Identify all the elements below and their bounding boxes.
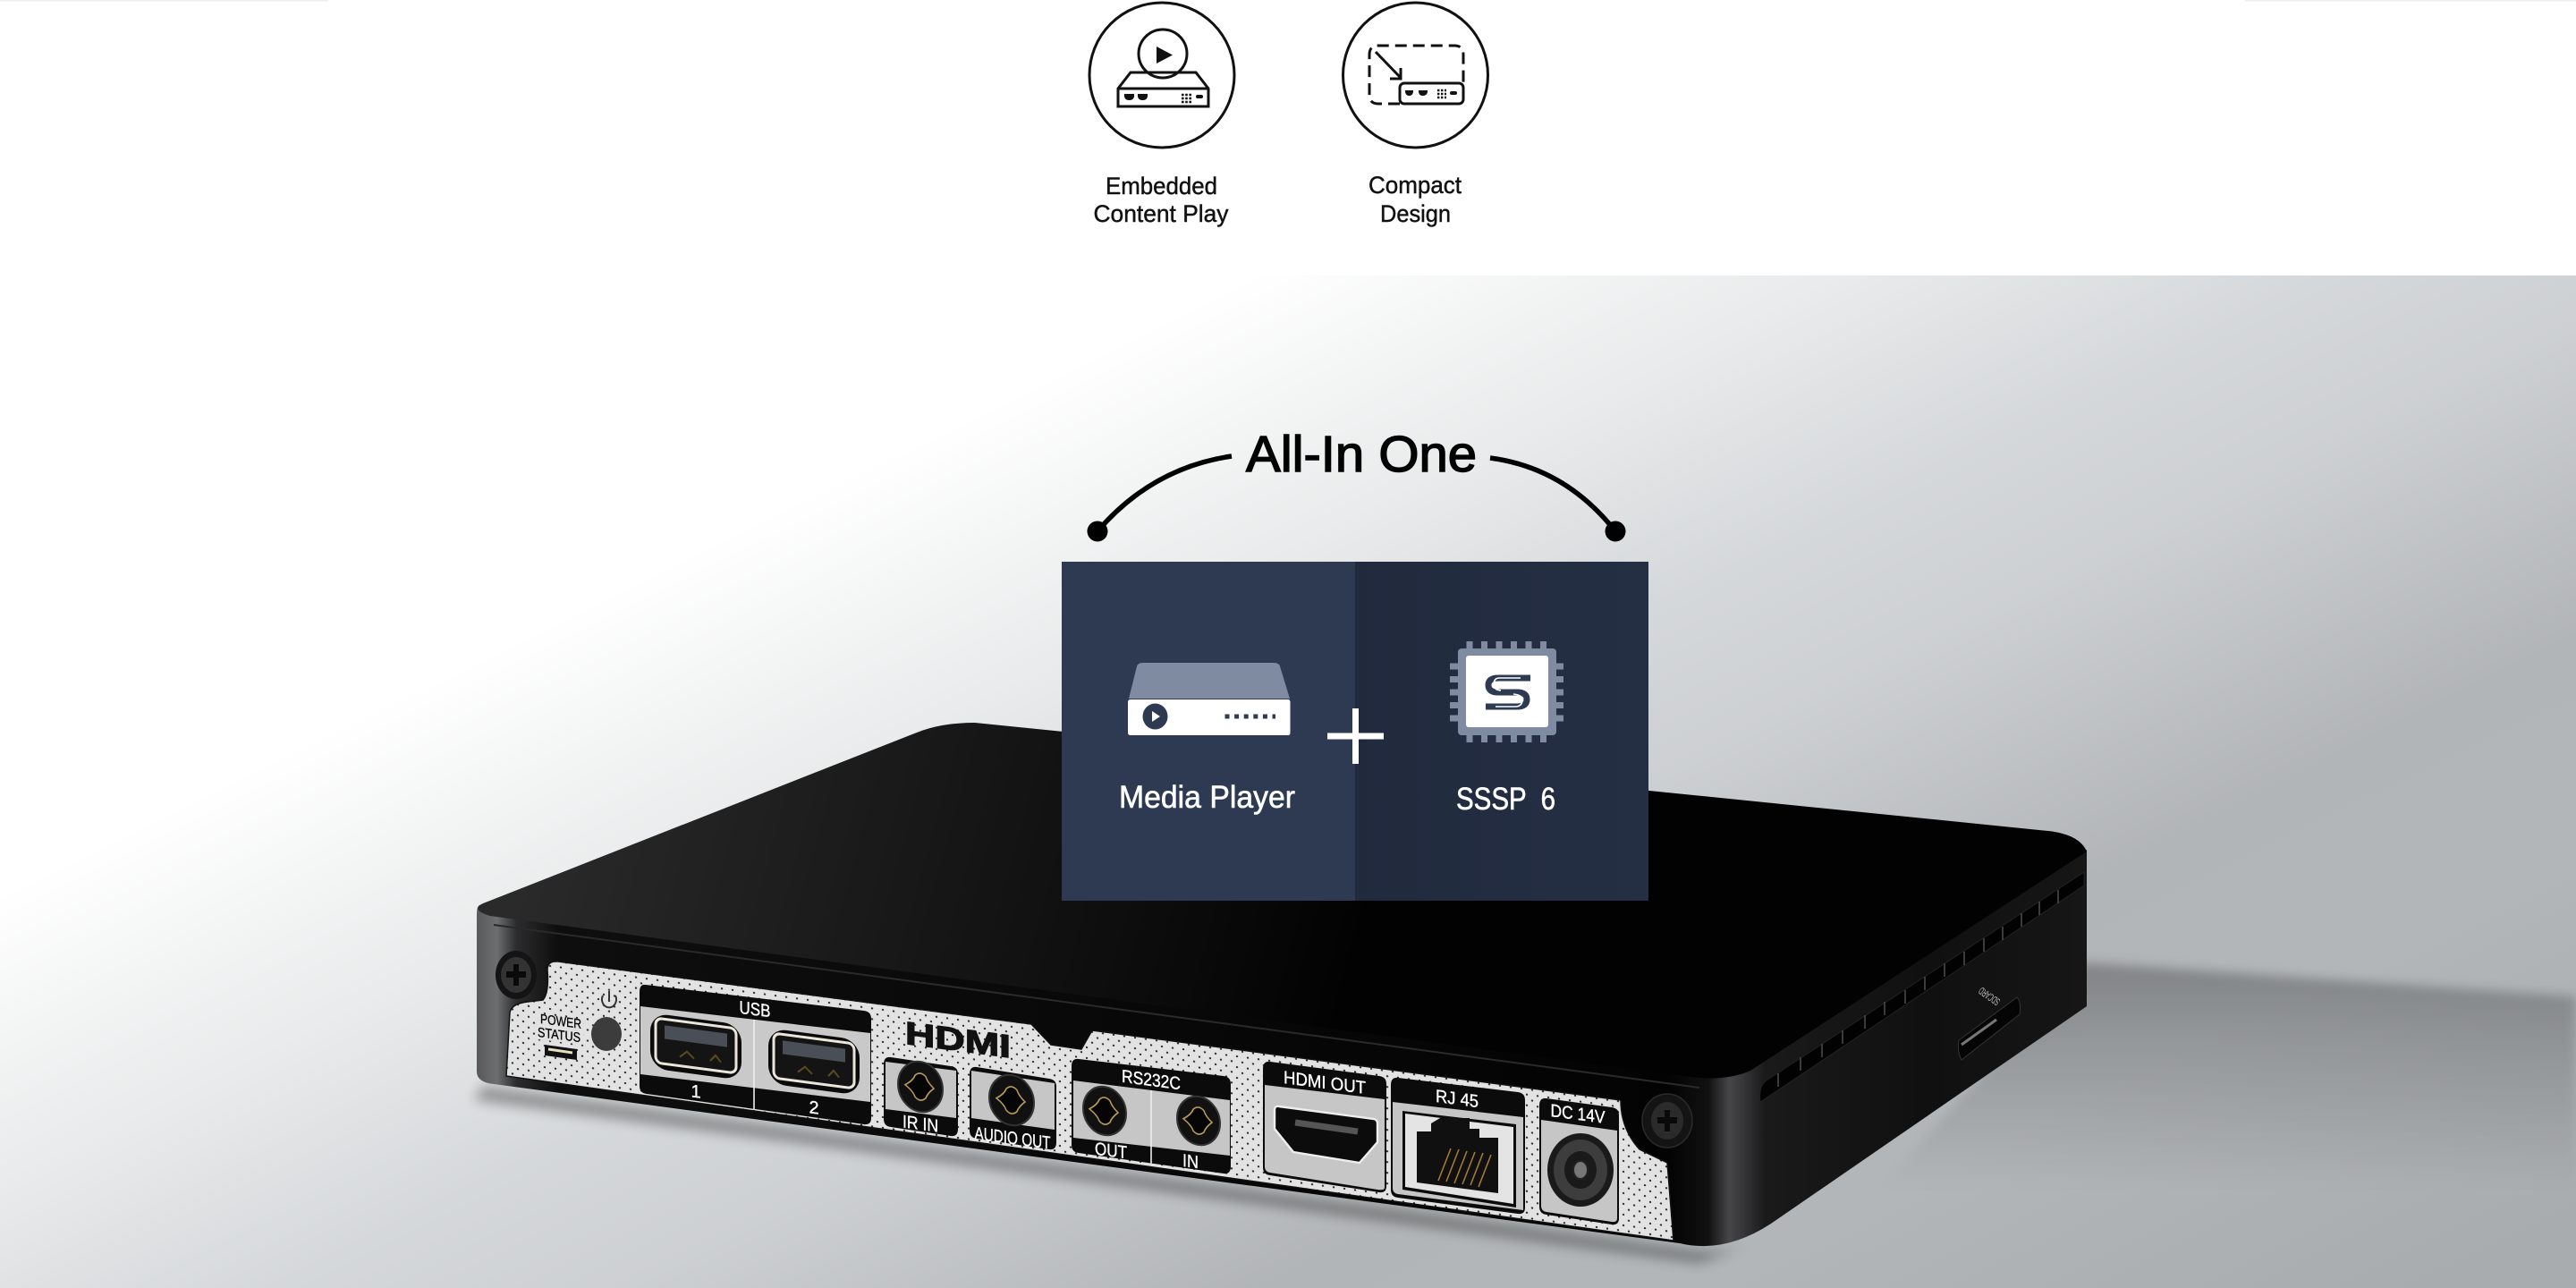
USB block xyxy=(640,985,871,1124)
device top surface xyxy=(478,723,2087,1078)
heading: All-In One: All-In One xyxy=(1246,426,1477,483)
AUDIO OUT port: AUDIO OUT xyxy=(975,1123,1050,1154)
RJ 45 port: RJ 45 xyxy=(1436,1087,1479,1112)
device: media player box xyxy=(474,723,2087,1263)
DC 14V port xyxy=(1539,1098,1619,1224)
microSD slot: SDCARD xyxy=(1976,985,2003,1008)
AUDIO OUT port xyxy=(970,1067,1056,1154)
power status label and controls: STATUS xyxy=(538,1025,580,1046)
background: grey gradient stage xyxy=(0,275,2576,1288)
icon: media player xyxy=(1128,663,1290,735)
icon: compact design xyxy=(1343,3,1488,148)
RS232C block xyxy=(1072,1059,1231,1174)
device ground shadow xyxy=(474,1086,1753,1263)
power status label and controls: POWER xyxy=(540,1012,581,1032)
bevel line xyxy=(494,925,1699,1088)
label: embedded content play xyxy=(1093,173,1229,227)
device front and side faces xyxy=(477,850,2087,1246)
label: compact design xyxy=(1368,172,1462,227)
connector arc: All-In One xyxy=(1088,456,1626,542)
silver connector plate xyxy=(506,962,1674,1241)
panel: media player + sssp xyxy=(1062,562,1648,901)
HDMI OUT port xyxy=(1263,1062,1386,1192)
panel: SSSP side xyxy=(1355,562,1648,901)
label: SSSP 6: SSSP 6 xyxy=(1456,782,1555,817)
HDMI logo: HDMI xyxy=(905,1014,1011,1065)
screw: left xyxy=(496,951,537,999)
USB block: 1 xyxy=(691,1081,701,1103)
screw: right xyxy=(1642,1094,1692,1148)
RS232C block: OUT xyxy=(1095,1140,1127,1163)
label: compact design: Compact xyxy=(1368,172,1462,199)
DC 14V port: DC 14V xyxy=(1551,1101,1606,1128)
label: Media Player: Media Player xyxy=(1119,780,1295,815)
microSD slot xyxy=(1958,985,2021,1060)
IR IN port: IR IN xyxy=(902,1112,938,1137)
label: compact design: Design xyxy=(1380,200,1451,227)
RJ 45 port xyxy=(1391,1078,1525,1214)
IR IN port xyxy=(884,1057,958,1137)
icon: SSSP chip xyxy=(1450,641,1563,742)
white header band xyxy=(0,0,2576,277)
RS232C block: IN xyxy=(1182,1151,1199,1173)
power status label and controls xyxy=(538,991,622,1060)
plus sign xyxy=(1327,708,1384,764)
side vent slot xyxy=(1760,872,2084,1102)
label: embedded content play: Content Play xyxy=(1093,200,1229,227)
label: embedded content play: Embedded xyxy=(1106,173,1217,199)
USB block: USB xyxy=(739,998,771,1021)
icon: embedded content play xyxy=(1089,3,1234,148)
panel: media player side xyxy=(1062,562,1355,901)
USB block: 2 xyxy=(809,1097,819,1119)
HDMI OUT port: HDMI OUT xyxy=(1284,1068,1366,1098)
RS232C block: RS232C xyxy=(1122,1067,1181,1094)
